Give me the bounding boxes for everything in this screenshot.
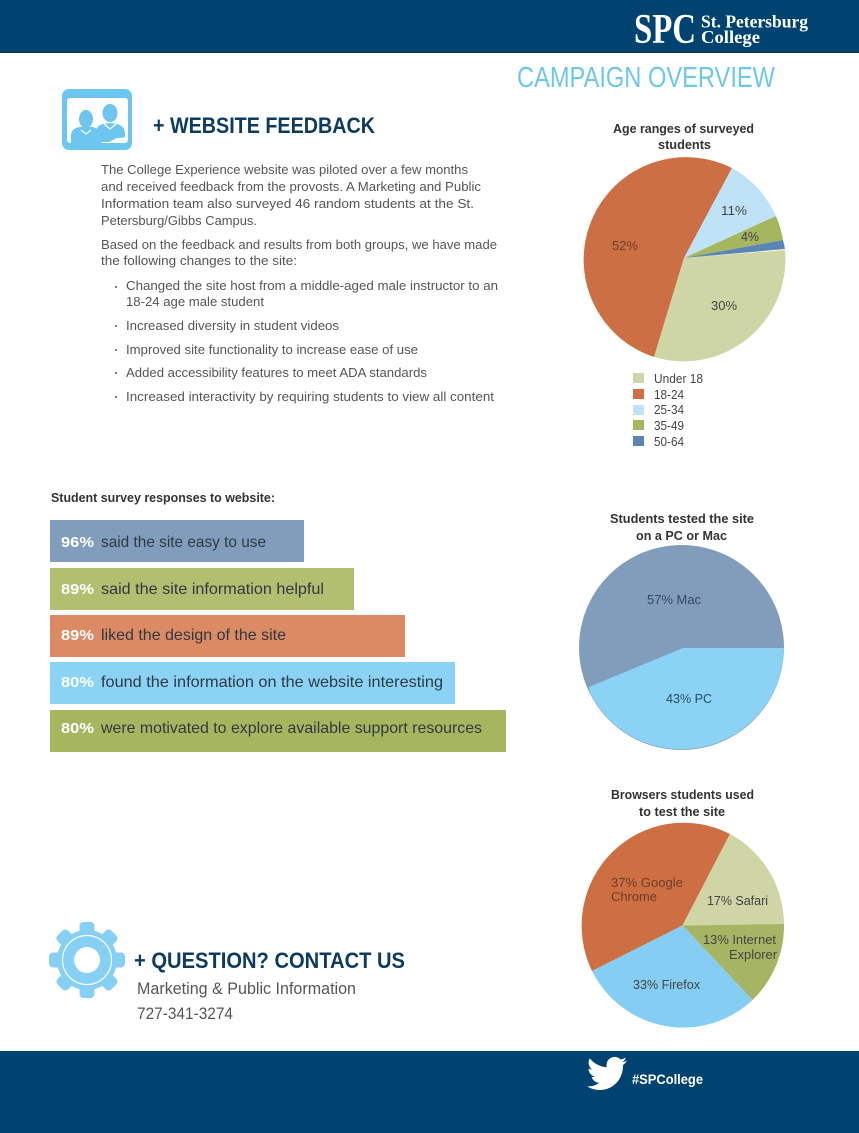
panel: PC or Mac pie chart: 57% Mac xyxy=(647,593,701,607)
panel: age ranges pie chart: 52% xyxy=(612,239,638,253)
bullet list of changes: Added accessibility features to meet ADA standards xyxy=(126,365,428,380)
bar chart: survey responses xyxy=(50,520,506,752)
panel: age ranges pie chart xyxy=(584,121,785,449)
bullet list of changes: 18-24 age male student xyxy=(126,294,264,309)
intro text: and received feedback from the provosts. A Marketing and Public xyxy=(101,179,482,194)
intro text: Petersburg/Gibbs Campus. xyxy=(101,213,257,228)
bar chart: survey responses: 80% xyxy=(61,720,94,737)
panel: browsers pie chart: 17% Safari xyxy=(707,894,768,908)
panel: browsers pie chart: 33% Firefox xyxy=(633,978,701,992)
intro text: the following changes to the site: xyxy=(101,253,297,268)
bullet list of changes: Improved site functionality to increase ease of use xyxy=(126,342,418,357)
logo: SPC xyxy=(634,7,696,53)
header band xyxy=(0,0,859,53)
heading: website feedback: + WEBSITE FEEDBACK xyxy=(153,113,375,138)
bar chart: survey responses: liked the design of the site xyxy=(101,627,286,644)
panel: age ranges pie chart: 18-24 xyxy=(654,388,684,402)
logo: College xyxy=(701,27,760,47)
panel: browsers pie chart xyxy=(582,787,784,1028)
heading: contact: + QUESTION? CONTACT US xyxy=(134,948,405,973)
panel: browsers pie chart: 37% Google xyxy=(611,876,683,890)
panel: age ranges pie chart: 11% xyxy=(721,204,747,218)
footer band xyxy=(0,1051,859,1133)
panel: age ranges pie chart: 25-34 xyxy=(654,403,684,417)
panel: age ranges pie chart: 4% xyxy=(741,230,759,244)
panel: browsers pie chart: Chrome xyxy=(611,890,657,904)
panel: browsers pie chart: Explorer xyxy=(729,948,777,962)
bullet list of changes xyxy=(115,278,498,404)
panel: age ranges pie chart: 50-64 xyxy=(654,435,684,449)
panel: age ranges pie chart: students xyxy=(658,137,711,152)
logo: St. Petersburg xyxy=(701,12,808,32)
panel: age ranges pie chart: 35-49 xyxy=(654,419,684,433)
intro text: Information team also surveyed 46 random students at the St. xyxy=(101,196,474,211)
heading: survey responses: Student survey responses to website: xyxy=(51,490,275,505)
bullet list of changes: Changed the site host from a middle-aged male instructor to an xyxy=(126,278,498,293)
bar chart: survey responses: were motivated to explore available support resources xyxy=(100,720,482,737)
panel: PC or Mac pie chart: Students tested the site xyxy=(610,511,754,526)
bar chart: survey responses: said the site easy to use xyxy=(101,534,266,551)
bar chart: survey responses: 96% xyxy=(61,534,94,551)
bullet list of changes: Increased interactivity by requiring students to view all content xyxy=(126,389,494,404)
panel: PC or Mac pie chart: 43% PC xyxy=(666,692,712,706)
bar chart: survey responses: 89% xyxy=(61,581,94,598)
icon: people xyxy=(62,89,132,150)
icon: gear xyxy=(49,922,125,998)
panel: browsers pie chart: to test the site xyxy=(639,804,725,819)
panel: age ranges pie chart: Under 18 xyxy=(654,372,703,386)
bar chart: survey responses: said the site information helpful xyxy=(101,581,324,598)
contact details: Marketing & Public Information xyxy=(137,979,356,998)
contact details xyxy=(137,979,356,1023)
bar chart: survey responses: 89% xyxy=(61,627,94,644)
contact details: 727-341-3274 xyxy=(137,1004,233,1023)
logo xyxy=(634,7,808,53)
panel: PC or Mac pie chart: on a PC or Mac xyxy=(636,528,727,543)
hashtag: #SPCollege xyxy=(632,1072,703,1087)
title: CAMPAIGN OVERVIEW xyxy=(517,62,776,94)
icon: twitter bird xyxy=(587,1057,627,1090)
panel: browsers pie chart: Browsers students used xyxy=(611,787,754,802)
panel: age ranges pie chart: Age ranges of surveyed xyxy=(613,121,754,136)
bar chart: survey responses: 80% xyxy=(61,674,94,691)
intro text: The College Experience website was piloted over a few months xyxy=(101,162,468,177)
bullet list of changes: Increased diversity in student videos xyxy=(126,318,340,333)
panel: age ranges pie chart: 30% xyxy=(711,299,737,313)
intro text xyxy=(101,162,497,268)
intro text: Based on the feedback and results from both groups, we have made xyxy=(101,237,497,252)
panel: PC or Mac pie chart xyxy=(579,511,784,750)
panel: browsers pie chart: 13% Internet xyxy=(703,933,777,947)
bar chart: survey responses: found the information on the website interesting xyxy=(101,674,443,691)
